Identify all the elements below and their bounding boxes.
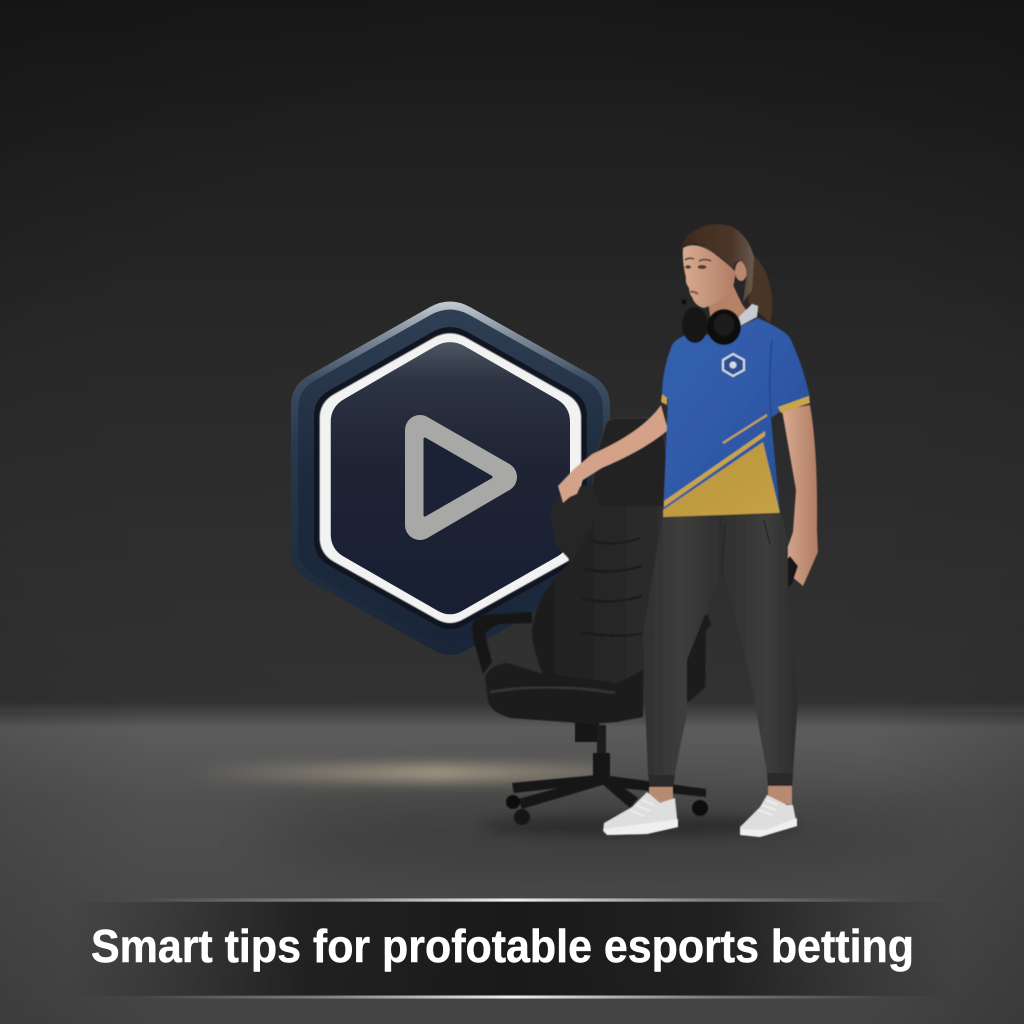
chair seat — [485, 663, 643, 724]
sleeve seam — [770, 340, 772, 418]
title text: Smart tips for profotable esports betting — [91, 920, 914, 972]
sleeve cuffs — [661, 394, 810, 413]
ankles — [649, 786, 792, 806]
woman in esports jersey — [558, 224, 818, 837]
jersey gold panel — [663, 442, 780, 517]
game controller — [767, 556, 798, 593]
facial features — [685, 258, 711, 294]
ponytail — [748, 254, 772, 323]
jersey gold stripes — [664, 415, 767, 507]
chair headrest — [590, 418, 668, 508]
play triangle — [420, 430, 502, 525]
title band — [70, 898, 954, 998]
chair backrest — [532, 484, 668, 682]
floor with light streak — [0, 702, 1024, 1024]
trouser cuffs — [649, 773, 793, 788]
gaming chair — [472, 418, 711, 825]
bottom glow line — [140, 996, 884, 998]
neck — [708, 285, 752, 342]
top glow line — [140, 898, 884, 902]
left shoe — [603, 792, 678, 835]
chair right side — [680, 615, 711, 703]
headset around neck — [682, 300, 758, 345]
far arm and hand — [558, 405, 668, 503]
near arm — [782, 405, 818, 586]
icon: hexagon play badge — [291, 302, 610, 655]
white neon ring — [320, 333, 581, 623]
pants — [643, 514, 798, 788]
ear and face — [683, 245, 736, 308]
background wall — [0, 0, 1024, 730]
hair — [682, 224, 754, 302]
jersey crest — [723, 354, 744, 376]
jersey — [662, 318, 810, 516]
right shoe — [740, 795, 797, 837]
chair base and casters — [506, 722, 708, 825]
chair armrest — [472, 612, 532, 674]
